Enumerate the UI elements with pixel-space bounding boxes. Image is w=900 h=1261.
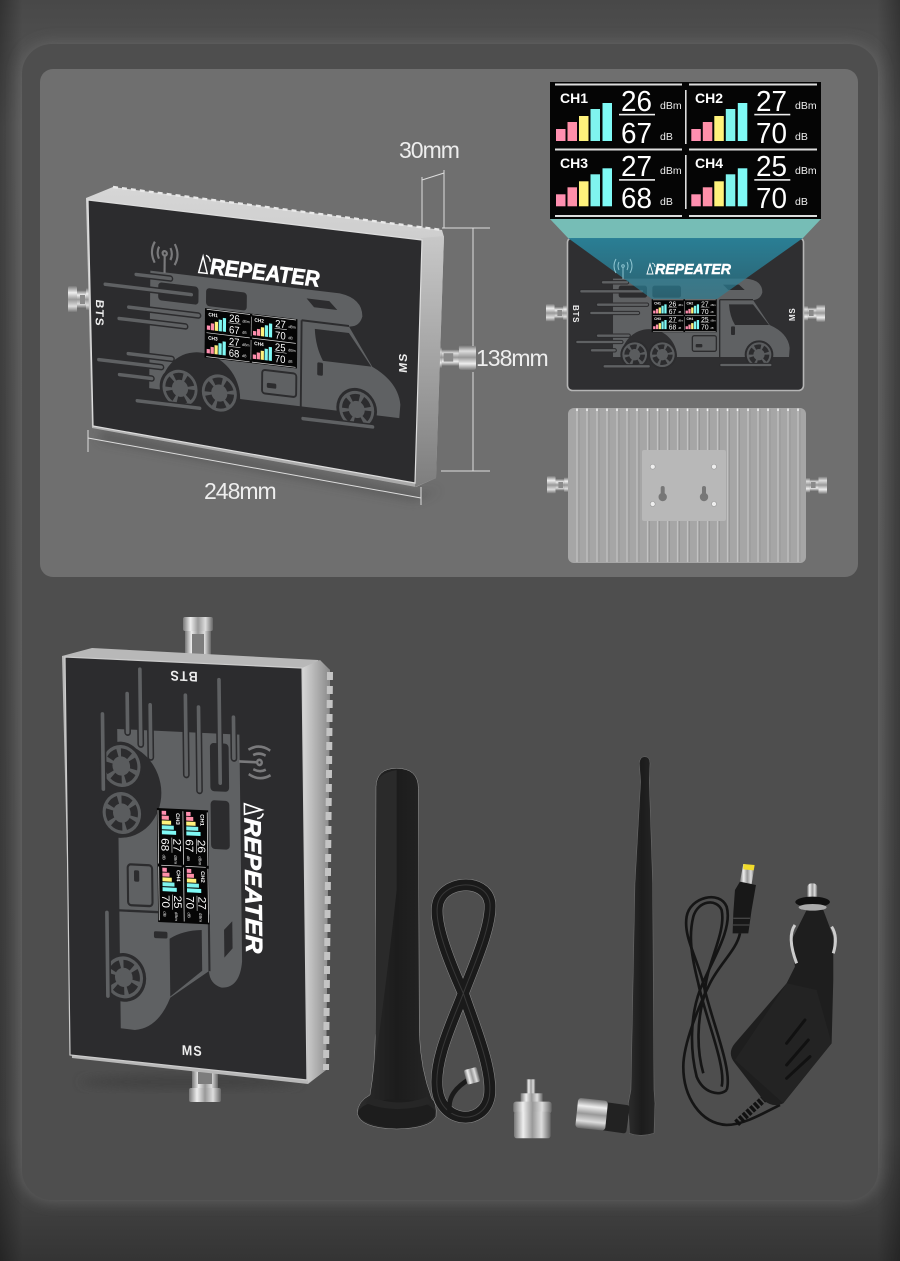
LCD display: 25	[171, 895, 183, 909]
port labels	[571, 305, 797, 323]
port labels: MS	[397, 352, 410, 374]
LCD display: 27	[229, 337, 240, 349]
device: vertical front view	[62, 617, 330, 1102]
LCD display: dBm	[173, 855, 178, 865]
van illustration	[96, 264, 401, 436]
LCD display: dBm	[710, 304, 716, 307]
dimension: 248mm: 248mm	[204, 478, 276, 504]
enlarged LCD display: 67	[621, 118, 652, 150]
LCD display: 68	[229, 348, 240, 361]
connector: right	[804, 476, 827, 494]
graphics over beam	[571, 259, 797, 332]
dimension: 138mm	[441, 228, 548, 471]
port labels: BTS	[93, 299, 106, 327]
enlarged LCD display: dB	[795, 131, 808, 143]
LCD display: 68	[158, 838, 170, 851]
port labels	[169, 667, 203, 1059]
enlarged LCD display: 26	[621, 86, 652, 118]
LCD display: CH3	[654, 317, 661, 321]
elbow antenna	[575, 757, 655, 1135]
LCD display: CH3	[174, 813, 180, 825]
port labels: BTS	[169, 667, 198, 685]
LCD display: dBm	[710, 319, 716, 322]
LCD display: 26	[195, 840, 206, 853]
LCD display: 25	[701, 317, 709, 324]
enlarged LCD display: CH1	[560, 90, 588, 106]
dimension: 138mm: 138mm	[476, 345, 548, 371]
LCD display: CH2	[686, 301, 693, 305]
LCD display: dB	[710, 327, 714, 330]
device: front view with dimensions	[68, 187, 476, 500]
enlarged LCD display: dBm	[795, 100, 817, 112]
LCD display: dB	[242, 330, 247, 335]
device graphics	[92, 234, 411, 437]
enlarged LCD display: CH3	[560, 155, 588, 171]
LCD display: 70	[184, 896, 195, 909]
LCD display: 27	[701, 301, 709, 308]
LCD display: 67	[669, 309, 676, 316]
port labels: MS	[788, 308, 797, 321]
dimension: 30mm	[399, 137, 459, 228]
LCD display: CH4	[254, 341, 264, 348]
enlarged LCD display: dB	[660, 196, 673, 208]
adapter	[513, 1079, 552, 1138]
LCD display: 25	[275, 342, 286, 355]
connector: top	[183, 617, 213, 657]
port labels: BTS	[571, 305, 580, 323]
LCD display: 70	[275, 330, 286, 343]
LCD display: 27	[275, 319, 286, 331]
heat sink body	[568, 408, 806, 563]
body frame	[62, 648, 330, 1084]
enlarged LCD display: 70	[756, 118, 787, 150]
LCD display: dB	[288, 359, 293, 364]
LCD display: dBm	[288, 325, 296, 330]
LCD display: 70	[275, 354, 286, 366]
coiled cable	[437, 885, 490, 1117]
enlarged LCD display: dBm	[795, 165, 817, 177]
signal icon	[614, 259, 632, 279]
LCD display: CH1	[208, 312, 218, 319]
device: back view	[547, 408, 827, 563]
logo: REPEATER	[655, 261, 731, 278]
LCD display: 26	[229, 313, 240, 326]
plug	[733, 882, 756, 933]
port labels: MS	[182, 1042, 203, 1059]
enlarged LCD display	[550, 82, 821, 219]
LCD display	[157, 808, 209, 924]
LCD display: 70	[159, 895, 171, 908]
charger body	[731, 910, 833, 1105]
enlarged LCD display: dB	[660, 131, 673, 143]
port labels	[93, 299, 410, 374]
LCD display: 70	[701, 325, 709, 332]
LCD display: dB	[162, 911, 167, 917]
LCD display	[205, 308, 297, 369]
LCD display: dBm	[288, 348, 296, 353]
car charger	[683, 864, 835, 1125]
logo: REPEATER	[210, 253, 320, 292]
LCD display: dBm	[678, 304, 683, 307]
LCD display: 70	[701, 309, 709, 316]
LCD display: CH3	[208, 335, 218, 343]
LCD display: 27	[195, 896, 207, 910]
LCD display: CH2	[254, 318, 264, 325]
enlarged LCD display: 70	[756, 183, 787, 215]
enlarged LCD display: dBm	[660, 100, 682, 112]
enlarged LCD display: dB	[795, 196, 808, 208]
device graphics	[98, 664, 274, 1062]
enlarged LCD display: 27	[621, 151, 652, 183]
LCD display: CH1	[198, 814, 204, 826]
connector: bottom	[189, 1068, 221, 1102]
enlarged LCD display: 68	[621, 183, 652, 215]
LCD display: dB	[162, 854, 166, 860]
enlarged LCD display: 27	[756, 86, 787, 118]
LCD display: dB	[187, 912, 191, 918]
logo: REPEATER	[239, 818, 267, 954]
connector: right	[802, 304, 825, 322]
LCD display: dBm	[198, 856, 202, 866]
LCD display: dB	[186, 856, 191, 861]
mounting plate	[642, 450, 726, 521]
LCD display: dB	[242, 354, 247, 359]
LCD display: 68	[669, 325, 676, 332]
connector: left	[547, 476, 570, 494]
LCD display: dB	[710, 311, 714, 314]
LCD display: dB	[678, 327, 681, 330]
connector: MS port	[430, 345, 476, 370]
signal icon	[239, 746, 271, 779]
LCD display: 26	[669, 301, 676, 308]
connector: left	[546, 304, 569, 322]
LCD display: dB	[288, 336, 293, 341]
LCD display: CH2	[199, 871, 205, 883]
LCD display: CH4	[175, 870, 181, 883]
LCD display: 67	[183, 839, 194, 853]
enlarged LCD display: CH2	[695, 90, 723, 106]
LCD display	[652, 299, 717, 332]
LCD display: 27	[170, 838, 182, 852]
LCD display: CH1	[654, 301, 661, 305]
LCD display: dBm	[174, 912, 179, 922]
enlarged LCD display: dBm	[660, 165, 682, 177]
connector: BTS port	[68, 286, 92, 313]
signal icon	[152, 241, 178, 274]
van illustration	[98, 665, 243, 1035]
cable connector	[464, 1067, 480, 1085]
teal zoom beam	[550, 219, 821, 299]
panel: dimensions and views	[40, 69, 858, 577]
van illustration	[576, 279, 790, 369]
magnetic antenna	[357, 768, 436, 1129]
enlarged LCD display: CH4	[695, 155, 723, 171]
LCD display: dBm	[242, 343, 250, 348]
LCD display: 67	[229, 325, 240, 337]
LCD display: CH4	[686, 317, 693, 321]
panel body	[568, 238, 804, 390]
LCD display: dBm	[198, 913, 203, 923]
device: small front view	[546, 219, 825, 390]
LCD display: dBm	[242, 319, 250, 324]
dimension: 30mm: 30mm	[399, 137, 459, 163]
LCD display: 27	[669, 317, 676, 324]
LCD display: dB	[678, 311, 681, 314]
accessories	[357, 757, 835, 1138]
enlarged LCD display: 25	[756, 151, 787, 183]
device body frame	[86, 187, 444, 487]
dimension: 248mm	[88, 430, 421, 505]
LCD display: dBm	[678, 319, 683, 322]
